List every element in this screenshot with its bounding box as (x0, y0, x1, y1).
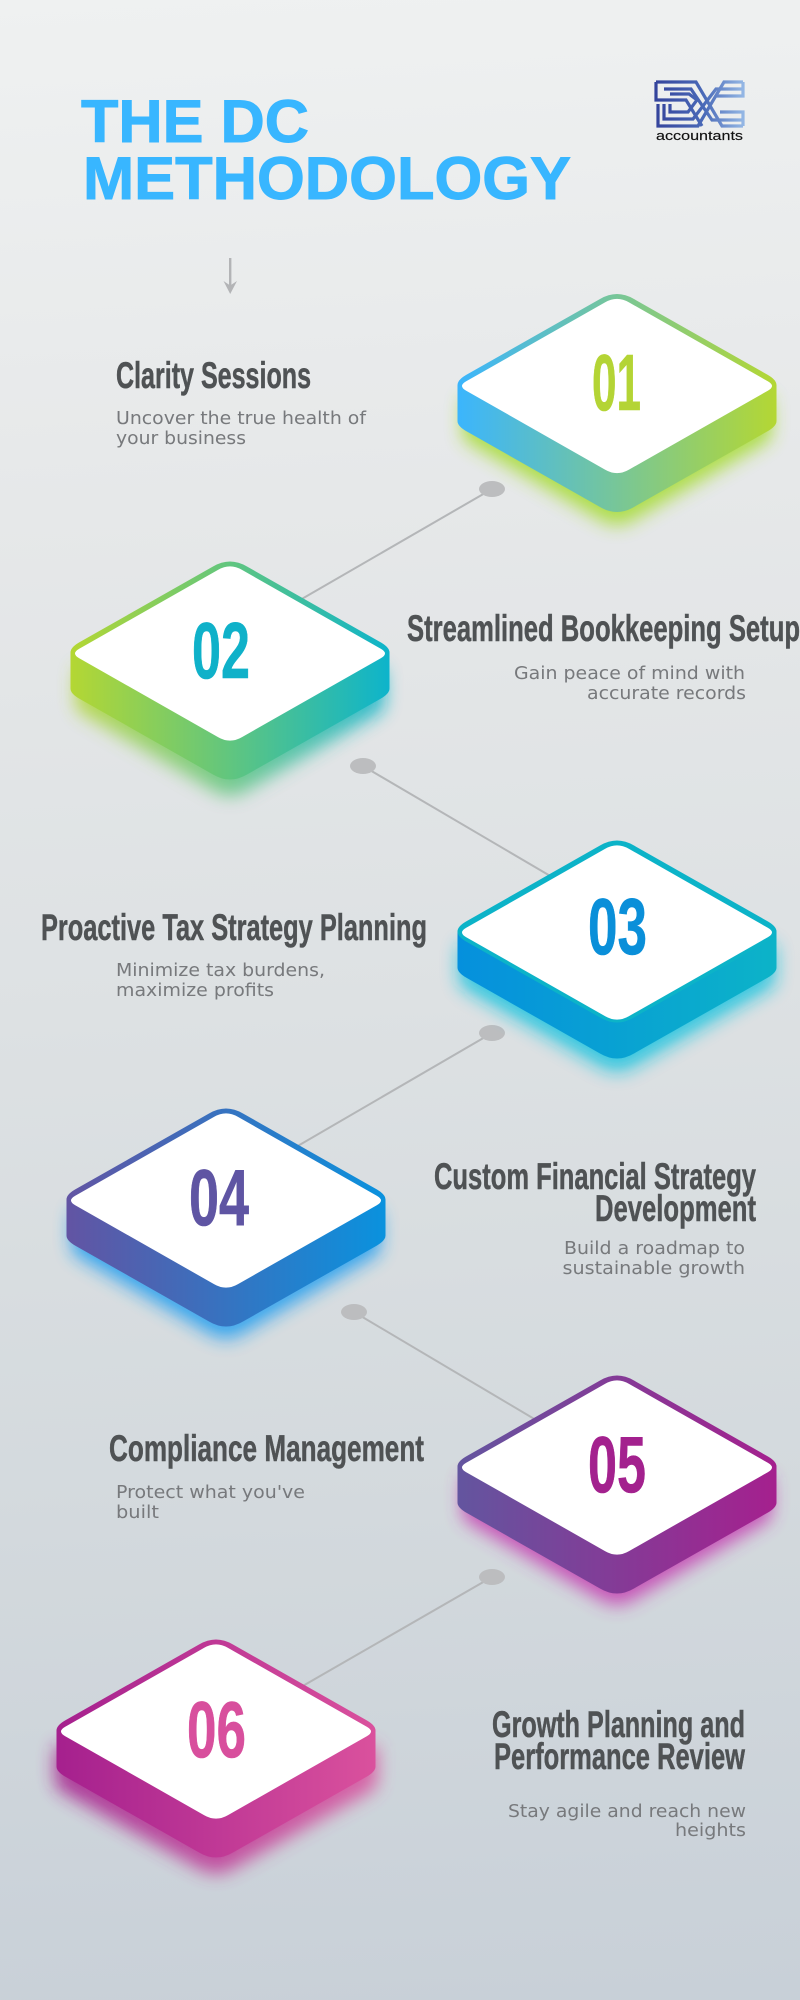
number 01: 01 (592, 338, 641, 427)
diamond 02 (70, 562, 390, 796)
heading 06 (492, 1704, 745, 1777)
number 04: 04 (189, 1153, 249, 1242)
description 06: heights (675, 1820, 746, 1841)
logo mark (656, 82, 743, 126)
logo wordmark: accountants (656, 128, 744, 143)
connector 5 to 6 (301, 1569, 505, 1687)
connector 4 to 5 (341, 1304, 536, 1420)
description 06: Stay agile and reach new (508, 1801, 746, 1822)
heading 01: Clarity Sessions (116, 355, 311, 396)
connector 2 to 3 (350, 758, 552, 877)
description 01: Uncover the true health of (116, 408, 367, 429)
description 05: Protect what you've (116, 1482, 305, 1503)
number 05: 05 (588, 1420, 646, 1509)
diamond 06 (55, 1640, 377, 1874)
description 02: Gain peace of mind with (514, 663, 745, 684)
description 05: built (116, 1502, 159, 1523)
description 03 (116, 960, 325, 1001)
step 04 (66, 1108, 756, 1338)
title (81, 88, 571, 212)
diamond 01 (458, 294, 776, 525)
number 02: 02 (192, 606, 250, 695)
step 05 (109, 1376, 776, 1604)
description 02 (514, 663, 746, 704)
heading 03: Proactive Tax Strategy Planning (41, 907, 427, 948)
diamond 04 (66, 1108, 386, 1338)
description 02: accurate records (587, 683, 746, 704)
diamond 05 (458, 1376, 776, 1604)
step 01 (116, 294, 776, 525)
connector 1 to 2 (300, 481, 505, 600)
description 01 (116, 408, 367, 449)
number 06: 06 (187, 1685, 246, 1774)
step 06 (55, 1640, 746, 1874)
heading 05: Compliance Management (109, 1428, 424, 1469)
description 05 (116, 1482, 305, 1523)
description 04: sustainable growth (562, 1258, 745, 1279)
logo (656, 82, 744, 143)
diamond 03 (458, 840, 776, 1072)
description 06 (508, 1801, 746, 1841)
description 04 (562, 1238, 745, 1279)
step 02 (70, 562, 800, 796)
number 03: 03 (588, 882, 647, 971)
heading 04 (434, 1156, 756, 1229)
title: METHODOLOGY (83, 145, 571, 212)
connector 3 to 4 (296, 1025, 505, 1147)
description 01: your business (116, 428, 246, 449)
arrow: down (224, 258, 237, 294)
description 03: Minimize tax burdens, (116, 960, 325, 981)
description 04: Build a roadmap to (564, 1238, 745, 1259)
description 03: maximize profits (116, 980, 274, 1001)
step 03 (41, 840, 776, 1072)
title: THE DC (81, 88, 309, 155)
